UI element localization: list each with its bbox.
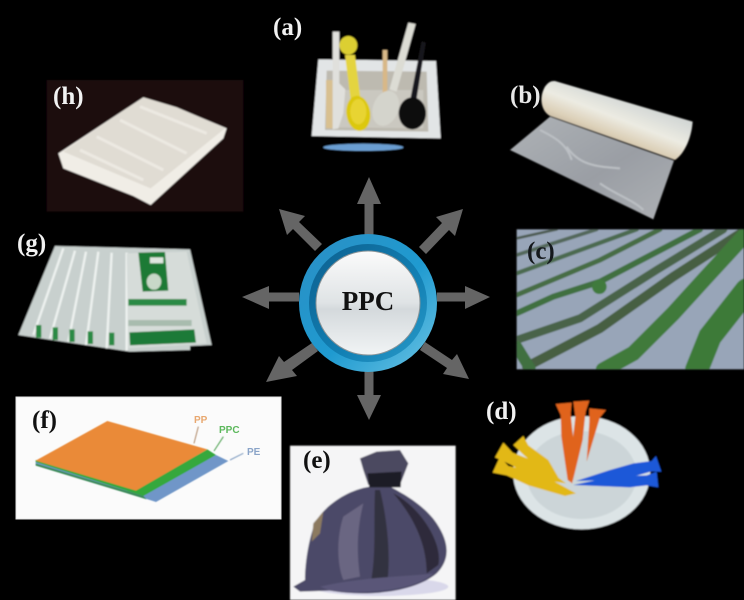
outer ring — [299, 234, 437, 372]
arrow: up left — [279, 209, 322, 251]
arrow: down — [357, 370, 381, 420]
panel: (d) plate and tees — [478, 390, 678, 533]
panel: (b) plastic film roll — [510, 81, 693, 219]
label PPC: PPC — [219, 425, 240, 436]
panel: (f) multilayer film diagram — [16, 397, 281, 519]
arrows radiating from centre — [242, 177, 490, 420]
panel: (g) printed bags — [5, 225, 225, 353]
arrow: up — [357, 177, 381, 235]
panel: (c) mulch film field — [517, 229, 744, 370]
photo: tray and spoons — [268, 8, 482, 152]
label (b): (b) — [510, 82, 541, 109]
arrow: down left — [266, 343, 318, 382]
arrow: right — [437, 286, 490, 309]
label (h): (h) — [53, 83, 84, 110]
label (a): (a) — [273, 14, 302, 41]
arrow: left — [242, 286, 299, 309]
photo: garbage bag — [290, 446, 456, 600]
panel: (h) foam board — [47, 80, 243, 212]
label PE: PE — [247, 447, 261, 458]
photo: field rows — [517, 229, 744, 370]
panel: (a) cutlery in tray — [268, 8, 482, 152]
label PP: PP — [194, 415, 208, 426]
label (e): (e) — [303, 447, 331, 474]
label (c): (c) — [527, 238, 555, 265]
photo: fan of bags — [5, 225, 225, 353]
label (d): (d) — [486, 398, 517, 425]
photo: film roll — [510, 81, 693, 219]
central PPC badge — [299, 234, 437, 372]
label PPC: PPC — [342, 286, 394, 316]
panel: (e) garbage bag — [290, 446, 456, 600]
photo: plate with tees — [478, 390, 678, 533]
button — [316, 251, 420, 355]
diagram: PP PPC PE layers — [36, 421, 243, 502]
label (g): (g) — [17, 230, 46, 257]
inner ring — [309, 244, 427, 362]
label (f): (f) — [32, 407, 57, 434]
panel background — [16, 397, 281, 519]
arrow: up right — [419, 209, 463, 254]
arrow: down right — [420, 342, 469, 379]
photo: foam slab — [47, 80, 243, 212]
